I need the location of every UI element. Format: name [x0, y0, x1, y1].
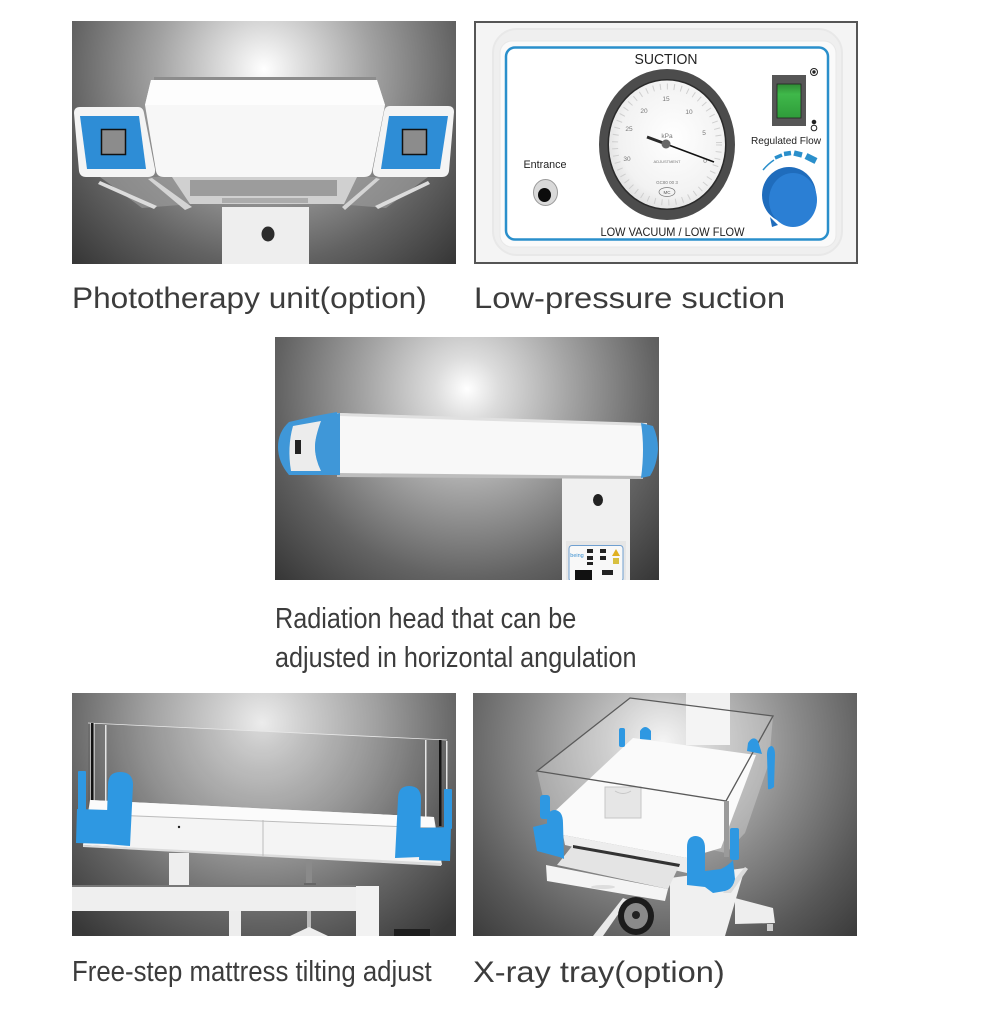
- under frame: [593, 867, 775, 936]
- panel: phototherapy unit: [72, 21, 456, 264]
- clear hood: [537, 698, 773, 853]
- caption: suction: Low-pressure suction: [474, 282, 785, 315]
- panel: x-ray tray: [473, 693, 857, 936]
- underside arms: [98, 177, 430, 210]
- caption: phototherapy: Phototherapy unit(option): [72, 282, 427, 315]
- caption: mattress tilting: Free-step mattress tilting adjust: [72, 956, 432, 988]
- hood rail: [537, 698, 773, 801]
- base frame: [72, 853, 430, 936]
- entrance port: [524, 159, 566, 206]
- panel: low-pressure suction: [474, 21, 858, 264]
- gauge: GC80 00 3: [656, 180, 678, 185]
- x-ray drawer: [546, 845, 680, 901]
- caption: radiation head: [275, 603, 636, 674]
- blue clips: [533, 727, 775, 893]
- on/off symbols: [810, 68, 818, 131]
- chrome post: [724, 801, 729, 857]
- gauge: 0: [703, 158, 707, 165]
- gauge: kPa: [661, 133, 673, 140]
- caption: radiation head: adjusted in horizontal angulation: [275, 642, 636, 674]
- mattress: [553, 738, 756, 873]
- gauge: 25: [625, 126, 633, 133]
- blue knob: [762, 167, 817, 227]
- panel: mattress tilting: [72, 693, 456, 936]
- gauge: MC: [664, 190, 671, 195]
- caption: x-ray tray: X-ray tray(option): [473, 956, 725, 989]
- right side panel: [373, 106, 454, 177]
- gauge: 5: [702, 130, 706, 137]
- radiation head: [278, 412, 658, 479]
- stand and control panel: [562, 478, 630, 582]
- lamp body: [145, 77, 385, 204]
- blue clips: [76, 771, 452, 861]
- entrance port: Entrance: [524, 159, 566, 171]
- stand and control panel: being: [570, 553, 584, 559]
- flow scale: [763, 153, 816, 170]
- switch: [772, 75, 806, 126]
- gauge: 20: [640, 108, 648, 115]
- x-ray film pocket: [605, 787, 641, 818]
- mattress tray: [83, 800, 442, 866]
- gauge: 15: [662, 96, 670, 103]
- gauge: 30: [623, 156, 631, 163]
- clear side panel: [88, 723, 450, 828]
- background column: [686, 693, 730, 745]
- caption: radiation head: Radiation head that can be: [275, 603, 576, 635]
- low vacuum label: LOW VACUUM / LOW FLOW: [600, 225, 745, 239]
- panel: radiation head: [275, 337, 659, 580]
- left side panel: [74, 107, 155, 177]
- suction label: SUCTION: [634, 51, 698, 68]
- gauge: 10: [685, 109, 693, 116]
- flow label: Regulated Flow: [751, 135, 821, 147]
- gauge: [599, 69, 735, 220]
- gauge: ADJUSTMENT: [654, 159, 681, 164]
- stand: [222, 207, 309, 264]
